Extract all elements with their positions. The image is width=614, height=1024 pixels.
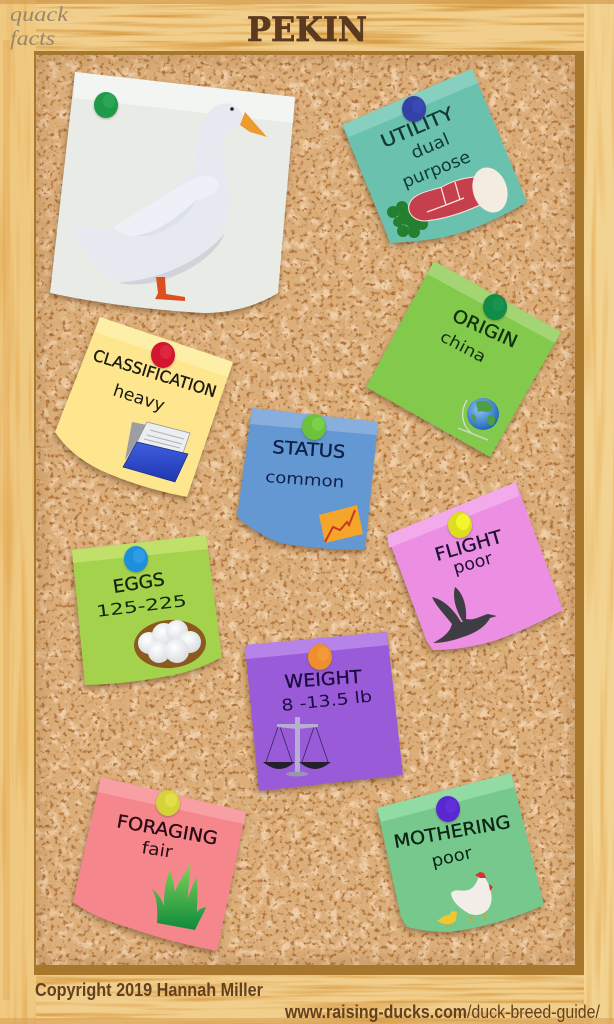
heading and value [378, 103, 474, 193]
heading and value: china [437, 327, 489, 367]
pin: red [151, 342, 175, 368]
heading and value [433, 526, 506, 579]
note: classification [55, 317, 233, 497]
note: status [237, 408, 378, 550]
heading and value: EGGS [111, 569, 166, 598]
copyright: Copyright 2019 Hannah Miller [35, 980, 263, 1000]
heading and value: FORAGING [115, 811, 219, 850]
website url: www.raising-ducks.com/duck-breed-guide/ [284, 1002, 600, 1022]
heading and value: FLIGHT [433, 526, 506, 566]
pin: navy [402, 96, 426, 122]
pin: dark green [483, 294, 507, 320]
quack facts label: facts [10, 26, 55, 50]
heading and value: poor [451, 549, 495, 579]
note: utility [342, 69, 527, 243]
pin: lime [302, 414, 326, 440]
title: PEKIN [247, 10, 367, 50]
pin: blue [124, 546, 148, 572]
note: flight [387, 482, 563, 650]
note: weight [245, 632, 403, 791]
note: foraging [73, 777, 246, 951]
icon: blue folder [123, 422, 190, 482]
heading and value [115, 811, 219, 863]
heading and value: WEIGHT [284, 667, 363, 693]
heading and value: heavy [110, 381, 167, 416]
heading and value: common [265, 467, 345, 492]
quack facts label: quack [10, 2, 69, 26]
pin: green [94, 92, 118, 118]
heading and value [265, 437, 346, 492]
icon: white pekin duck [72, 103, 267, 301]
heading and value: STATUS [272, 437, 346, 463]
heading and value [95, 569, 188, 621]
heading and value: CLASSIFICATION [91, 346, 219, 401]
heading and value: 125-225 [95, 591, 188, 621]
icon: globe [458, 398, 499, 440]
icon: balance scale [266, 717, 328, 776]
pin: yellow [448, 512, 472, 538]
note: duck illustration [50, 72, 295, 313]
quack facts label [10, 2, 69, 50]
note: origin [366, 261, 561, 457]
heading and value [280, 667, 373, 715]
heading and value: UTILITY [378, 103, 458, 153]
icon: duck bill [240, 112, 267, 137]
heading and value: 8 -13.5 lb [280, 687, 373, 715]
icon: duck foot [155, 277, 185, 301]
icon: hen and chick [437, 872, 493, 928]
note: eggs [72, 535, 222, 685]
cork board [36, 55, 575, 965]
heading and value: fair [140, 838, 174, 863]
pin: pale yellow [156, 790, 180, 816]
heading and value: purpose [399, 147, 474, 193]
pin: purple [436, 796, 460, 822]
heading and value: dual [408, 130, 453, 164]
icon: parsley, meat and egg [387, 163, 513, 238]
heading and value [437, 305, 521, 367]
icon: rising chart [319, 505, 363, 543]
icon: flying duck silhouette [432, 587, 497, 643]
note: mothering [377, 773, 544, 932]
heading and value: MOTHERING [392, 812, 512, 853]
heading and value: ORIGIN [449, 305, 521, 353]
heading and value [392, 812, 512, 872]
heading and value: poor [430, 843, 474, 872]
icon: nest of eggs [132, 618, 208, 670]
icon: grass tuft [151, 864, 206, 930]
pin: orange [308, 644, 332, 670]
